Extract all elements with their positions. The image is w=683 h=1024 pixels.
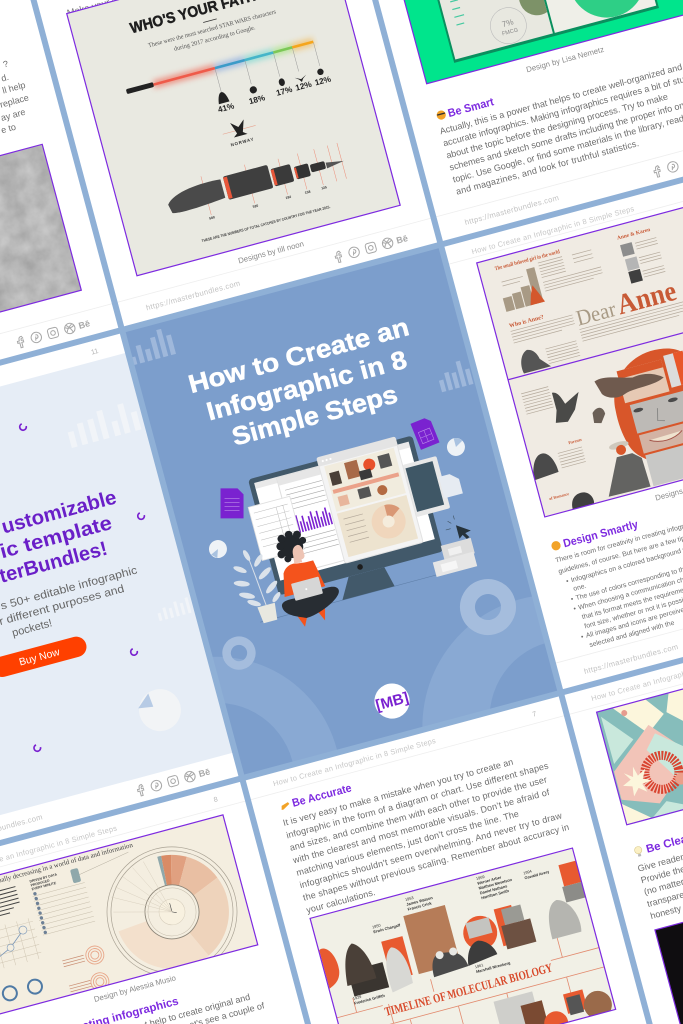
ad description [0,564,147,642]
photo collage upper [314,861,597,1008]
icon: nerd emoji [436,109,447,121]
text fragments: ll help [1,80,27,96]
star [619,763,654,798]
lightsaber chart: 17% [275,85,294,98]
face [292,544,304,564]
icon: thinking emoji [550,540,562,551]
logo: MB badge: [MB] [374,689,411,714]
title: Infographic in 8 [204,346,410,426]
bars right [439,360,474,392]
stacked boxes [429,538,478,577]
window with purple bar chart [277,466,348,572]
heading: Anne and friends: Anne & Karen [616,227,651,242]
button: Buy Now: Buy Now [18,647,62,669]
timeline labels: Daniel Nathans [479,883,508,895]
image: dark infographic [655,860,683,1024]
chart title: TIMELINE OF MOLECULAR BIOLOGY [383,961,554,1019]
body text: infographic in the form of a diagram or chart. Use different shapes [285,760,550,840]
illustration: computer and person [209,418,478,627]
timeline labels: Oswald Avery [524,869,551,880]
body text: with the clearest and most memorable visuals. Don't be afraid of [291,787,551,866]
image: Who's your father infographic: during 2017 according to Google. [173,24,257,53]
rails [329,919,616,1024]
timeline labels: 1994 [523,868,533,876]
body text with bullets: one. [573,583,587,593]
timeline labels: Frederick Griffith [354,993,386,1006]
right tablet [402,456,450,517]
scarf [594,363,666,402]
heading: Be Accurate [291,782,353,810]
icon: pie left [209,540,227,558]
decorative bars top [64,400,141,448]
decorative bars lower [156,597,192,621]
cover background [126,248,532,750]
body text: and sizes, and combine them with each other to provide the user [288,774,548,853]
left text column [0,887,22,923]
lightsaber chart [125,36,333,136]
image: green book mockup: FMCG [501,27,519,37]
body text: infographics shouldn't seem overwhelming. And never try to draw [299,810,563,890]
timeline labels: James Watson [406,895,434,907]
whale catch chart: 125 [321,185,327,191]
crossed legs [282,586,339,618]
headline: terBundles! [0,538,110,588]
headline: ustomizable [0,487,119,538]
lightsaber chart: 12% [295,80,313,93]
panel: customizable template ad page (left) [0,340,241,855]
heading: Design Smartly [562,519,640,550]
plant [233,550,280,624]
heading: small beloved girl: The small beloved girl in the world [494,249,561,272]
photo: man with hat [518,345,551,374]
ring right [463,582,513,632]
image: Dear Anne infographic: of Romance [549,491,570,501]
footer: https://masterbundles.com [583,642,679,676]
hair [603,343,683,465]
text fragments: ? [2,59,9,70]
image: colorful postcards [595,637,683,825]
image: Who's your father infographic [67,0,400,276]
timeline labels: Marshall Nirenberg [476,960,511,974]
body text with bullets: • [570,596,575,603]
background circle right [422,596,544,726]
shirt [284,560,326,597]
footer with url and social icons [115,218,438,321]
curly hair [276,530,306,562]
page number: 7 [532,711,538,719]
portrait strips [616,326,683,488]
footer divider and social icons [0,303,120,407]
chart footnote: THESE ARE THE NUMBERS OF TOTAL CATCHES BY COUNTRY FOR THE YEAR 2015. [201,205,331,243]
paper sheet [439,472,463,498]
list of social sources: DRIVEN BY DATA [29,872,58,884]
icon: purple document left [221,488,244,518]
person sitting with laptop [276,530,339,627]
panel: Be Accurate page (bottom middle) [244,701,646,1024]
whale catch chart: 580 [209,215,215,221]
small portraits [620,242,643,284]
timeline labels [331,857,571,1007]
ad description: pockets! [11,617,54,640]
timeline labels: Erwin Chargaff [373,922,401,934]
logo: MB badge [374,684,410,719]
timeline labels: 1929 [352,994,362,1001]
divider [508,310,683,380]
panel: Be Clear page (bottom right) [562,616,683,1024]
body text [637,851,683,921]
panel: creating infographics page (bottom left) [0,789,303,1024]
whale catch chart: 158 [304,190,311,195]
body text: honesty [649,903,683,921]
line chart grid [0,917,43,973]
panel: Be Smart page (top right) [404,0,683,225]
title [188,322,410,444]
image: Dear Anne infographic [476,192,683,517]
text fragments: ay are [0,107,26,123]
timeline labels: 1950 [371,922,382,930]
body text: Actually, this is a power that helps to create well-organized and [439,62,683,136]
whale catch chart: NORWAY [230,136,255,147]
body text: your calculations. [305,887,376,915]
body text [439,58,683,197]
timeline labels: 1969 [475,874,485,881]
image: green book mockup: 7% [501,17,514,29]
small arc charts [82,944,113,993]
dancing couple [548,386,585,425]
lightsaber chart: 18% [248,93,267,106]
lightsaber chart: 41% [217,101,236,114]
image: data and information chart [0,815,261,1024]
headline: ic template [0,512,114,563]
footer with url and social icons: https://masterbundles.com [145,279,241,312]
text fragments [0,56,36,135]
heading: Be Smart [447,96,495,120]
title: Simple Steps [229,380,401,452]
body text with bullets: selected and aligned with the [589,620,675,649]
monitor [248,436,442,600]
icon: cursor [446,516,471,539]
wordmark: Dear Anne: Dear [573,296,619,331]
image: green book mockup [375,0,683,84]
whale catch chart [152,97,350,230]
sunburst [641,752,683,793]
timeline labels: Hamilton Smith [481,888,510,900]
girl with hat [596,437,651,498]
running header: How to Create an Infographic in 8 Simple Steps [272,736,437,788]
photo collage lower [494,972,616,1024]
text fragments: e to [0,122,17,135]
panel: Star Wars infographic page (top middle) [38,0,438,321]
body text: the shapes without previous scaling. Remember about accuracy in [302,822,570,903]
purple ring accents [0,399,196,752]
whale catch chart: 184 [285,195,292,200]
background circle left [213,657,336,762]
panel: page with concrete texture image (top left) [0,48,120,407]
subtitle: These were the most searched STAR WARS characters [147,8,277,49]
icon: purple document right [410,416,440,450]
image: grey concrete texture [0,144,81,361]
running header: How to Create an Infographic in 8 Simple Steps [471,204,635,256]
headline [0,487,131,588]
caption: Design by Alessia Musio [93,973,178,1004]
text blocks [502,250,602,292]
timeline labels: 1961 [474,962,484,969]
footer with url and social icons: Bē [395,233,409,246]
body text with bullets: • [565,578,570,585]
ring left [224,638,254,668]
image: timeline of molecular biology [310,848,618,1024]
list of social sources: EVERY MINUTE [31,881,57,891]
timeline labels: Matthew Meselson [478,877,513,891]
icon: light bulb [634,846,643,857]
kissing couple [569,490,595,509]
footer [434,132,683,236]
window with table [248,496,304,561]
footer [0,766,212,847]
ad description: r different purposes and [0,583,126,628]
footer: https://masterbundles.com [464,193,560,227]
body text: and magazines, and look for truthful statistics. [455,138,640,197]
pie decoration [134,684,186,736]
couple portrait [528,451,559,480]
body text: about the topic before the designing process. Try to make [445,91,669,160]
panel: cover [126,248,558,774]
body text with bullets: • [573,605,578,613]
caption: Designs by till noon [237,239,305,265]
bars top left [132,329,176,365]
panel: Dear Anne page (right) [449,201,683,674]
radial clock chart [92,832,252,991]
bar chart [502,267,545,312]
timeline labels: Francis Crick [407,900,433,912]
whale catch chart: 520 [252,204,259,209]
list of social sources [28,866,95,935]
list of social sources: PRODUCED [30,878,50,887]
lightsaber chart: 12% [314,74,333,87]
text blocks lower: Parents [568,437,583,445]
icon: pencil [280,802,290,810]
central window with infographics [317,437,423,563]
footer: Bē [198,766,211,779]
timeline labels: Werner Arber [477,874,502,886]
caption: Design by Lisa Nemetz [525,45,605,74]
pill marker [70,868,81,883]
footer divider and social icons: Bē [77,318,91,331]
footer [552,579,683,683]
laptop [291,577,323,601]
gauges [1,978,44,1002]
body text with bullets: • [580,633,585,641]
timeline labels: 1953 [404,895,414,902]
ground line [260,574,440,622]
pale blue background [0,352,236,837]
page number: 11 [90,348,99,357]
ad description: s 50+ editable infographic [0,564,139,613]
button: Buy Now [0,634,89,679]
icon: pie right [447,438,465,456]
feet [298,608,326,627]
body text with bullets [555,506,683,652]
body text: It is very easy to make a mistake when you try to create an [282,757,514,828]
body text [281,747,573,915]
heading: Who is Anne: Who is Anne? [509,315,545,330]
text fragments: d. [0,72,10,83]
title: How to Create an [186,313,412,399]
body text: matching various elements, just don't cross the line. The [295,809,520,878]
page number: 8 [213,796,219,804]
